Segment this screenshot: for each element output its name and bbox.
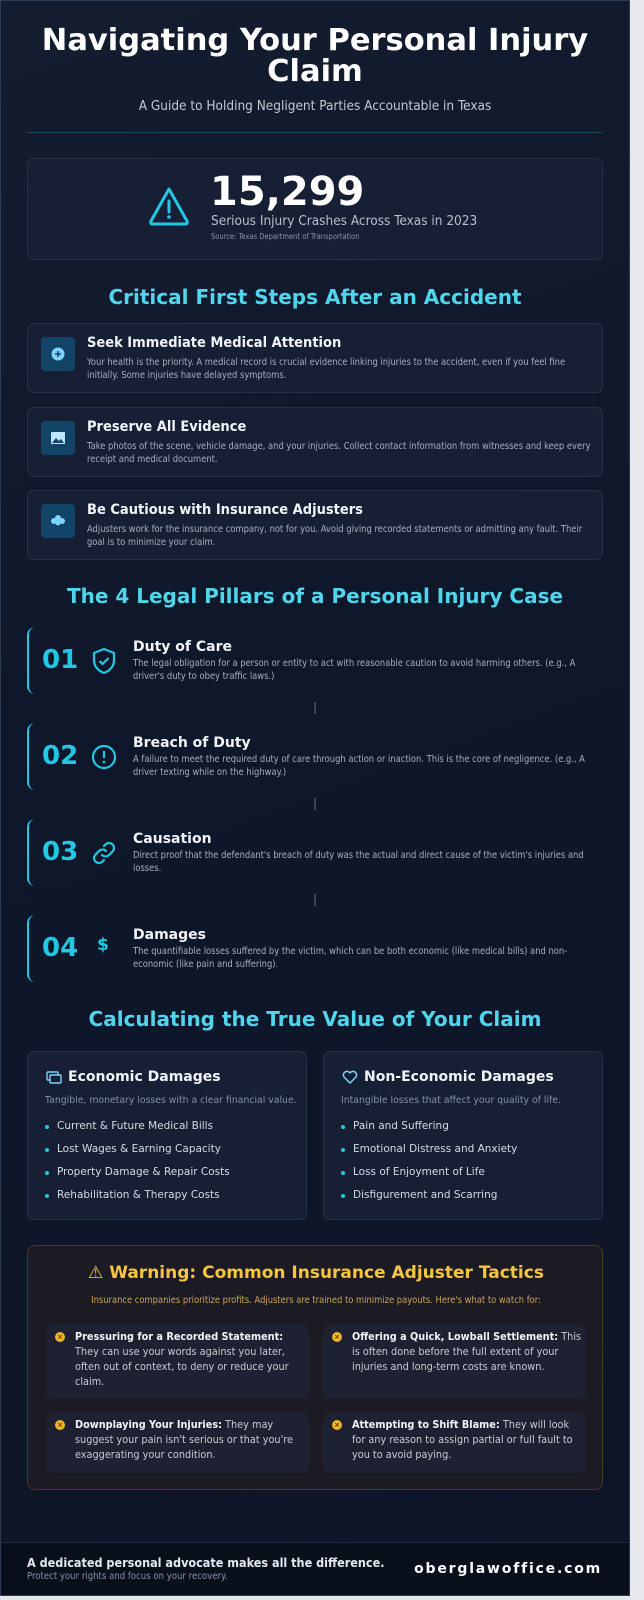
pillar 03 [27, 819, 603, 886]
card: medical [27, 323, 603, 393]
pillar 04: 04 [42, 933, 78, 963]
icon: medical [41, 337, 75, 371]
tactic 3: × [57, 1421, 63, 1429]
pillar 01: 01 [42, 645, 78, 675]
pillar 03: 03 [42, 837, 78, 867]
warning title: ⚠ Warning: Common Insurance Adjuster Tactics [88, 1263, 544, 1283]
pillar 01: Duty of Care [133, 639, 232, 655]
panel: economic: Rehabilitation & Therapy Costs [57, 1189, 220, 1201]
card: evidence: Take photos of the scene, vehicle damage, and your injuries. Collect contact information from witnesses and keep every receipt and medical document. [87, 441, 591, 465]
card: medical: Seek Immediate Medical Attention [87, 335, 341, 351]
heading: first steps: Critical First Steps After an Accident [108, 285, 522, 309]
icon: alert circle [92, 744, 116, 770]
panel: non-economic: Pain and Suffering [353, 1120, 449, 1132]
pillar 04: Damages [133, 927, 206, 943]
tactic 4: × [334, 1421, 340, 1429]
stat number: 15,299 [210, 169, 364, 215]
tactic 1: × [57, 1333, 63, 1341]
stat box [27, 158, 603, 260]
subtitle: A Guide to Holding Negligent Parties Accountable in Texas [139, 98, 491, 114]
icon: people [41, 504, 75, 538]
pillar 04: The quantifiable losses suffered by the victim, which can be both economic (like medical bills) and non-economic (like pain and suffering). [133, 946, 567, 970]
pillar 02 [27, 723, 603, 790]
card: evidence [27, 407, 603, 477]
panel: economic [27, 1051, 307, 1220]
tactic 2: Offering a Quick, Lowball Settlement: This is often done before the full extent of your injuries and long-term costs are known. [352, 1330, 581, 1373]
pillar 04 [27, 915, 603, 982]
pillar 02: Breach of Duty [133, 735, 251, 751]
tactic 1 [46, 1324, 309, 1399]
tactic 2 [323, 1324, 586, 1399]
stat label: Serious Injury Crashes Across Texas in 2023 [211, 213, 477, 229]
pillar 01 [27, 627, 603, 694]
heading: claim value: Calculating the True Value of Your Claim [89, 1007, 541, 1031]
card: evidence: Preserve All Evidence [87, 419, 246, 435]
warning subtitle: Insurance companies prioritize profits. Adjusters are trained to minimize payouts. Here's what to watch for: [91, 1295, 541, 1306]
panel: non-economic: Non-Economic Damages [364, 1069, 554, 1085]
tactic 1: Pressuring for a Recorded Statement: They can use your words against you later, often out of context, to deny or reduce your claim. [75, 1330, 289, 1388]
icon: heart [342, 1070, 358, 1084]
pillar 03: Direct proof that the defendant's breach of duty was the actual and direct cause of the victim's injuries and losses. [133, 850, 584, 874]
panel: non-economic: Disfigurement and Scarring [353, 1189, 497, 1201]
footer [1, 1542, 629, 1595]
icon: money [46, 1071, 62, 1084]
footer url: oberglawoffice.com [414, 1561, 602, 1577]
card: adjusters [27, 490, 603, 560]
panel: economic: Lost Wages & Earning Capacity [57, 1143, 221, 1155]
icon: dollar: $ [97, 935, 109, 955]
tactic 4: Attempting to Shift Blame: They will look for any reason to assign partial or full fault to you to avoid paying. [352, 1418, 573, 1461]
tactic 3: Downplaying Your Injuries: They may suggest your pain isn't serious or that you're exaggerating your condition. [75, 1418, 293, 1461]
panel: non-economic: Loss of Enjoyment of Life [353, 1166, 485, 1178]
heading: pillars: The 4 Legal Pillars of a Personal Injury Case [67, 584, 563, 608]
panel: economic: Property Damage & Repair Costs [57, 1166, 230, 1178]
title: Navigating Your Personal Injury [42, 23, 588, 58]
panel: economic: Current & Future Medical Bills [57, 1120, 213, 1132]
icon: image [41, 421, 75, 455]
icon: link [92, 842, 116, 864]
card: medical: Your health is the priority. A medical record is crucial evidence linking injuries to the accident, even if you feel fine initially. Some injuries have delayed symptoms. [87, 357, 565, 381]
pillar 01: The legal obligation for a person or entity to act with reasonable caution to avoid harming others. (e.g., A driver's duty to obey traffic laws.) [133, 658, 575, 682]
panel: non-economic: Intangible losses that affect your quality of life. [341, 1095, 561, 1106]
panel: warning [27, 1245, 603, 1490]
icon: warning triangle [149, 187, 189, 226]
tactic 4 [323, 1412, 586, 1473]
footer: Protect your rights and focus on your recovery. [27, 1571, 227, 1582]
icon: shield [92, 648, 116, 674]
panel: non-economic: Emotional Distress and Anxiety [353, 1143, 517, 1155]
source: Source: Texas Department of Transportation [211, 232, 359, 241]
tactic 2: × [334, 1333, 340, 1341]
title: Claim [267, 54, 363, 89]
card: adjusters: Be Cautious with Insurance Adjusters [87, 502, 363, 518]
pillar 03: Causation [133, 831, 212, 847]
card: adjusters: Adjusters work for the insurance company, not for you. Avoid giving recorded statements or admitting any fault. Their goal is to minimize your claim. [87, 524, 582, 548]
pillar 02: 02 [42, 741, 78, 771]
panel: non-economic [323, 1051, 603, 1220]
panel: economic: Tangible, monetary losses with a clear financial value. [45, 1095, 297, 1106]
footer tagline: A dedicated personal advocate makes all the difference. [27, 1555, 385, 1570]
pillar 02: A failure to meet the required duty of care through action or inaction. This is the core of negligence. (e.g., A driver texting while on the highway.) [133, 754, 585, 778]
title [42, 23, 588, 89]
tactic 3 [46, 1412, 309, 1473]
panel: economic: Economic Damages [68, 1069, 221, 1085]
